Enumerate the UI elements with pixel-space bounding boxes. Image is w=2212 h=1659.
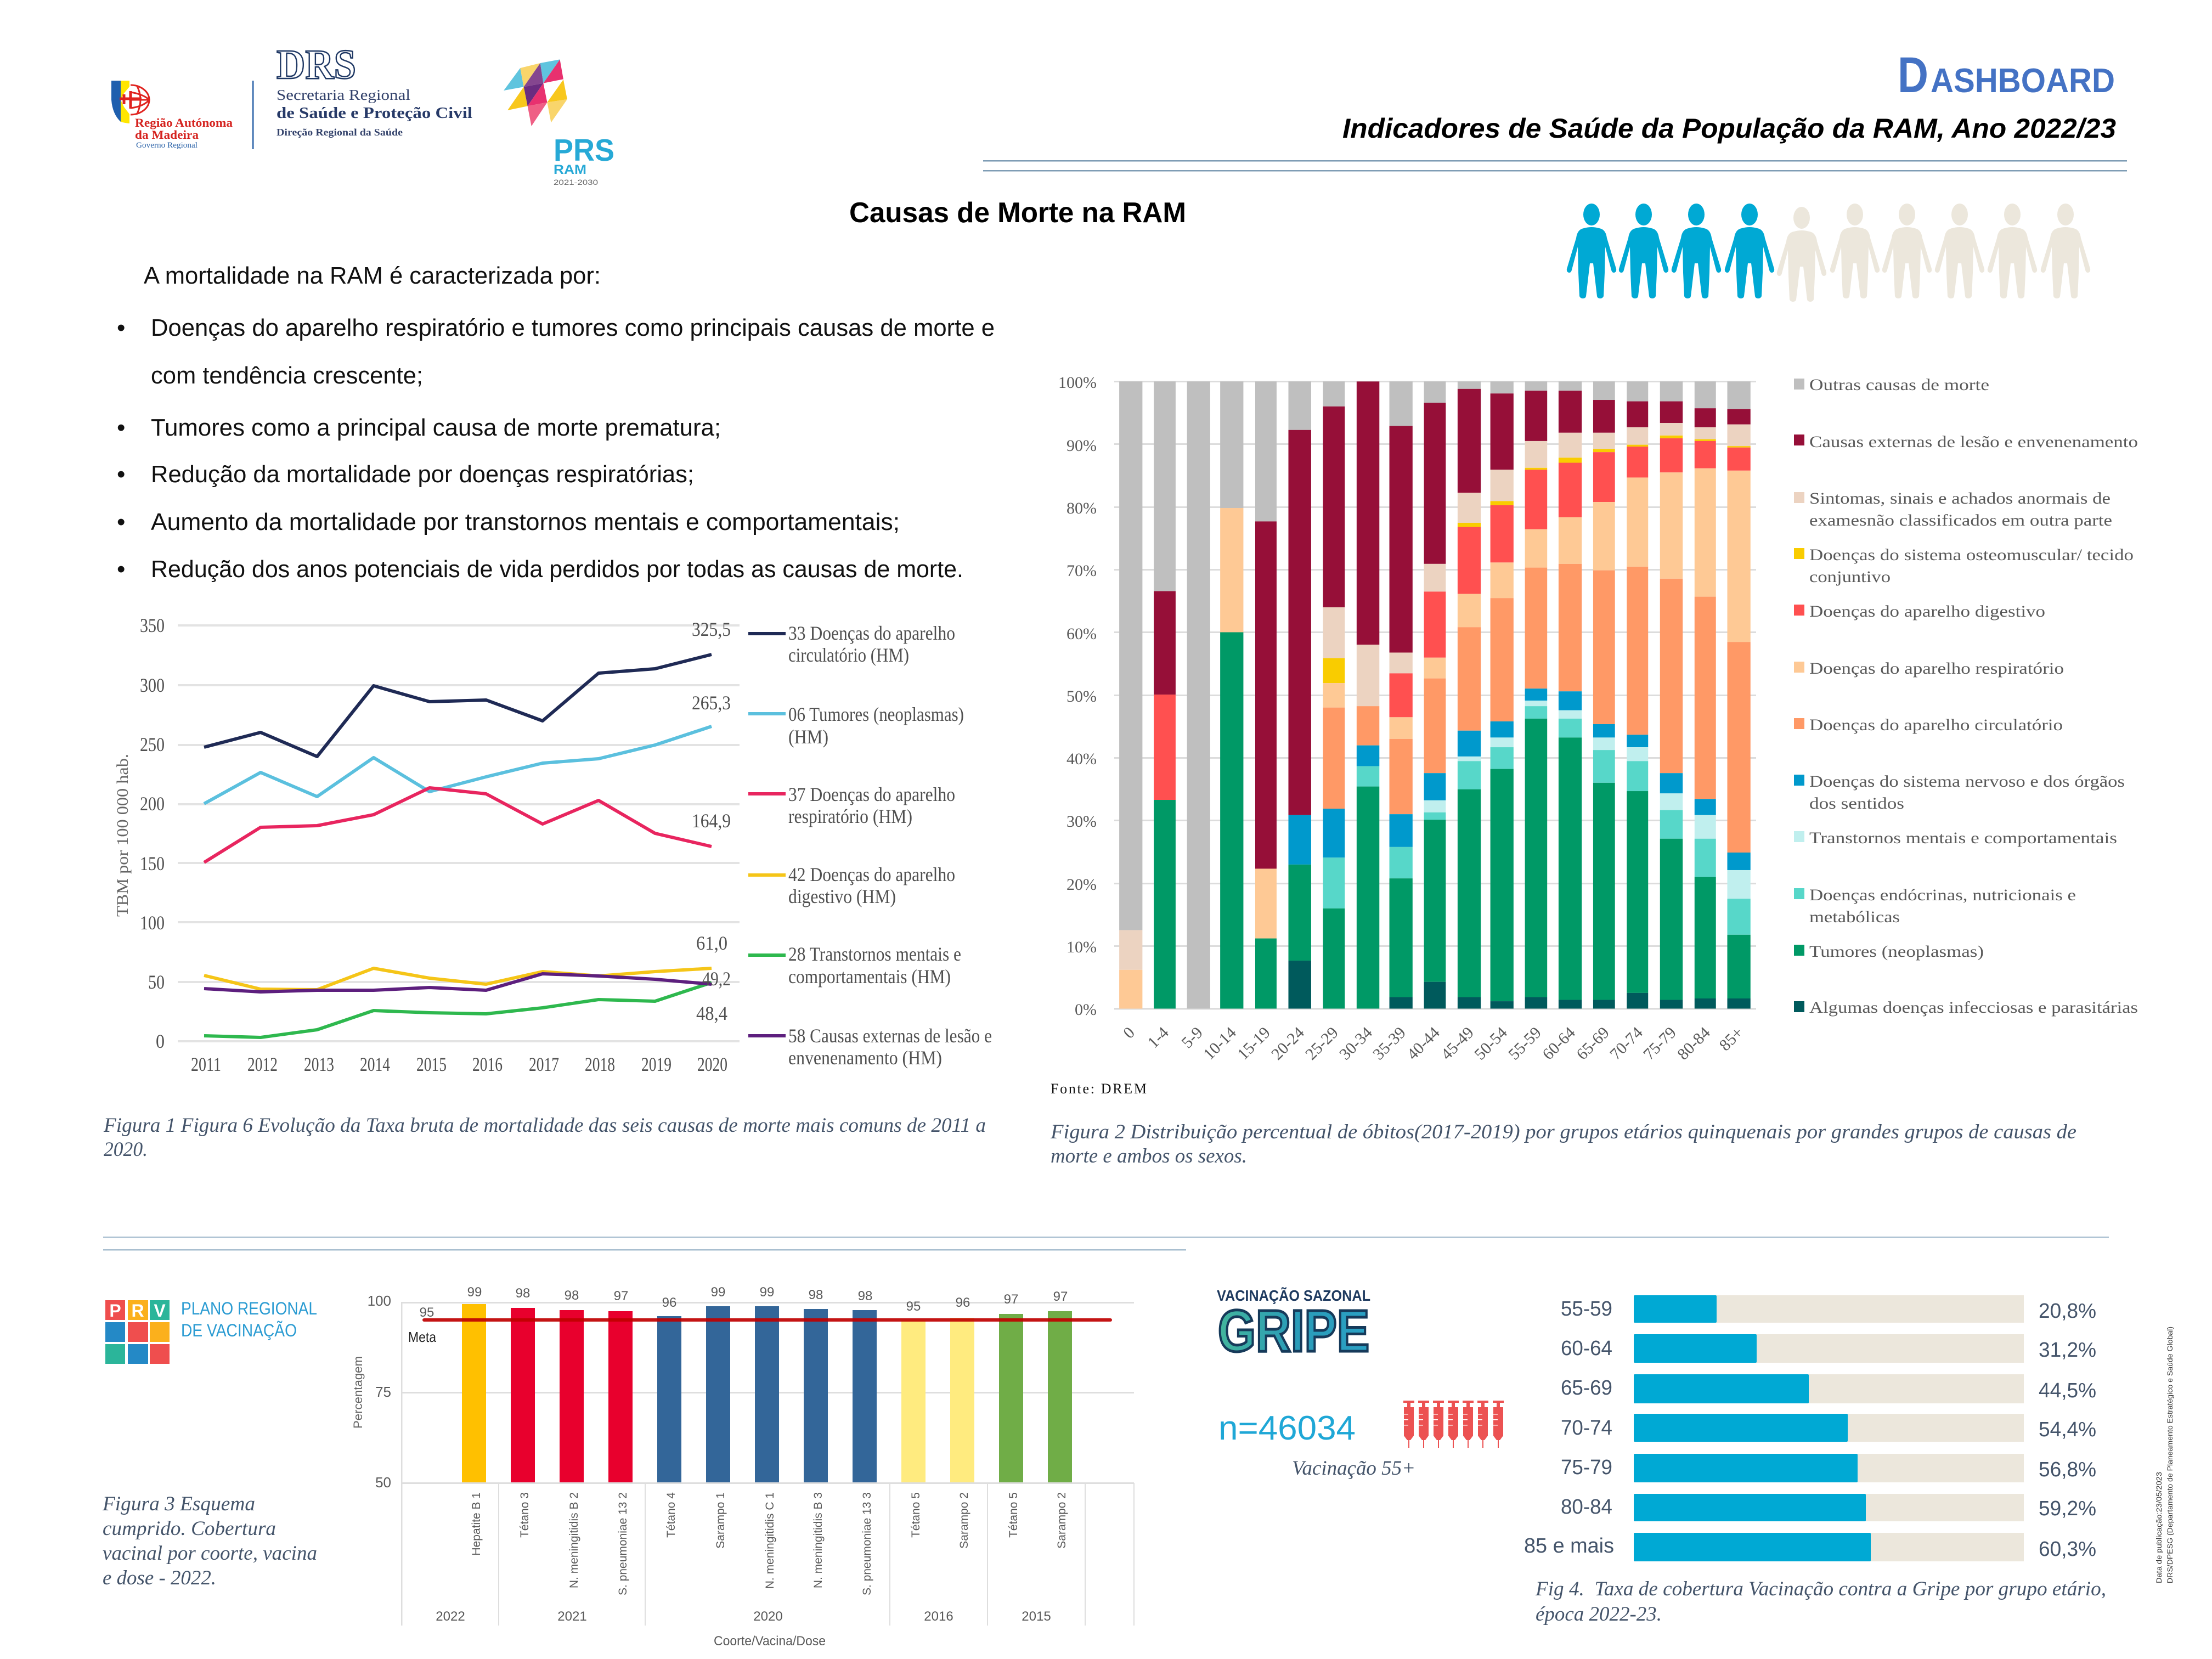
- age labels: 65-69: [1561, 1376, 1612, 1400]
- stacked chart legend: conjuntivo: [1809, 568, 1891, 586]
- line chart legend: (HM): [788, 726, 828, 748]
- text block: key findings: •: [117, 461, 125, 488]
- cohort years: 2020: [753, 1609, 783, 1624]
- y axis labels: 50: [148, 971, 165, 993]
- x axis labels: 2011: [191, 1053, 221, 1075]
- caption: figure 3: cumprido. Cobertura: [103, 1517, 276, 1540]
- stacked chart legend: Outras causas de morte: [1809, 376, 1989, 394]
- logo: DRS Secretaria Regional: DRS: [276, 42, 356, 88]
- line chart legend: circulatório (HM): [788, 644, 909, 666]
- x axis age groups: 85+: [1716, 1024, 1747, 1054]
- category labels: N. meningitidis C 1: [764, 1492, 776, 1589]
- x axis age groups: 1-4: [1144, 1024, 1172, 1052]
- caption: figure 4: Fig 4. Taxa de cobertura Vacinação contra a Gripe por grupo etário,: [1535, 1578, 2106, 1600]
- line chart legend: 58 Causas externas de lesão e: [788, 1025, 992, 1047]
- x axis age groups: 25-29: [1302, 1024, 1342, 1063]
- stacked chart legend: Tumores (neoplasmas): [1809, 943, 1984, 961]
- x axis labels: 2018: [585, 1053, 615, 1075]
- line chart legend: 37 Doenças do aparelho: [788, 783, 955, 805]
- category labels: N. meningitidis B 2: [568, 1492, 580, 1588]
- value labels: 99: [711, 1285, 725, 1300]
- x axis age groups: 15-19: [1234, 1024, 1274, 1063]
- x axis age groups: 45-49: [1437, 1024, 1477, 1063]
- x axis age groups: 65-69: [1573, 1024, 1613, 1063]
- y axis percent labels: 20%: [1066, 876, 1097, 894]
- horizontal bar chart: flu vaccination coverage by age: [1524, 1295, 2096, 1561]
- y axis labels: 350: [140, 614, 165, 636]
- y axis percent labels: 60%: [1066, 625, 1097, 643]
- value labels: 95: [906, 1299, 921, 1314]
- stacked chart legend: [1794, 376, 2138, 1017]
- stacked chart legend: Sintomas, sinais e achados anormais de: [1809, 489, 2111, 507]
- age labels: 60-64: [1561, 1337, 1612, 1360]
- x axis title: Coorte/Vacina/Dose: [714, 1634, 826, 1649]
- line chart legend: [748, 622, 992, 1069]
- y axis percent labels: 40%: [1066, 750, 1097, 768]
- text block: key findings: [117, 262, 995, 583]
- cohort years: 2015: [1022, 1609, 1051, 1624]
- subtitle: Indicadores de Saúde da População da RAM, Ano 2022/23: [1342, 113, 2116, 144]
- text block: key findings: •: [117, 314, 125, 341]
- caption: figure 2: morte e ambos os sexos.: [1051, 1145, 1247, 1167]
- text block: key findings: •: [117, 509, 125, 535]
- category labels: Sarampo 2: [958, 1492, 970, 1549]
- age labels: 75-79: [1561, 1456, 1612, 1479]
- publication note: DRS/DPESG (Departamento de Planeamento Estratégico e Saúde Global): [2165, 1327, 2174, 1583]
- value labels: 97: [1004, 1292, 1018, 1307]
- end value labels: [692, 618, 731, 1024]
- y axis labels: 300: [140, 674, 165, 696]
- target label: Meta: [408, 1329, 436, 1345]
- publication note: Data de publicação:23/05/2023: [2154, 1472, 2163, 1583]
- source note: Fonte: DREM: [1051, 1081, 1147, 1097]
- x axis labels: 2015: [416, 1053, 447, 1075]
- x axis labels: 2013: [304, 1053, 334, 1075]
- line chart: mortality rate 2011-2020: [114, 614, 992, 1075]
- header logos: [111, 42, 614, 187]
- value labels: 96: [662, 1295, 676, 1310]
- caption: figure 2: [1050, 1121, 2076, 1167]
- coverage bars: [462, 1304, 1072, 1482]
- bar chart: vaccination coverage by cohort: [351, 1285, 1135, 1649]
- value labels: 98: [858, 1289, 872, 1304]
- cohort years: 2021: [557, 1609, 587, 1624]
- x axis age groups: 5-9: [1178, 1024, 1206, 1052]
- percentage labels: 44,5%: [2039, 1379, 2096, 1402]
- end value labels: 164,9: [692, 810, 731, 832]
- category labels: [470, 1492, 1068, 1595]
- y axis percent labels: 50%: [1066, 687, 1097, 706]
- stacked bars: [1119, 381, 1751, 1009]
- category labels: Sarampo 2: [1056, 1492, 1068, 1549]
- y axis labels: 75: [375, 1384, 391, 1400]
- percentage labels: 60,3%: [2039, 1538, 2096, 1561]
- x axis age groups: 80-84: [1674, 1024, 1714, 1063]
- data lines: [204, 654, 712, 1037]
- section title: Causas de Morte na RAM: [849, 197, 1186, 229]
- logo: vacinação sazonal gripe: GRIPE: [1218, 1297, 1369, 1364]
- y axis percent labels: 0%: [1075, 1001, 1097, 1019]
- text block: key findings: com tendência crescente;: [151, 362, 423, 389]
- caption: figure 4: época 2022-23.: [1536, 1603, 1662, 1626]
- logo: plano regional de vacinação: [105, 1299, 317, 1364]
- x axis labels: 2014: [360, 1053, 390, 1075]
- logo: DRS Secretaria Regional: Secretaria Regional: [276, 87, 410, 103]
- stacked chart legend: Transtornos mentais e comportamentais: [1809, 829, 2117, 847]
- value labels: 97: [614, 1289, 628, 1304]
- value labels: 99: [760, 1285, 774, 1300]
- y axis percent labels: 100%: [1058, 374, 1097, 392]
- x axis age groups: 35-39: [1369, 1024, 1409, 1063]
- end value labels: 49,2: [702, 968, 731, 990]
- text block: key findings: Redução dos anos potenciais de vida perdidos por todas as causas de morte.: [151, 556, 963, 583]
- stacked chart legend: Doenças do aparelho digestivo: [1809, 602, 2045, 620]
- x axis labels: [191, 1053, 727, 1075]
- caption: figure 1: [103, 1114, 986, 1161]
- percentage labels: 56,8%: [2039, 1458, 2096, 1481]
- caption: figure 3: Figura 3 Esquema: [102, 1493, 255, 1515]
- age labels: 70-74: [1561, 1417, 1612, 1440]
- y axis percent labels: [1058, 374, 1097, 1019]
- caption: figure 3: e dose - 2022.: [103, 1567, 216, 1589]
- y axis percent labels: 30%: [1066, 812, 1097, 831]
- stacked chart legend: metabólicas: [1809, 908, 1900, 926]
- category labels: N. meningitidis B 3: [812, 1492, 825, 1588]
- x axis age groups: 30-34: [1336, 1024, 1376, 1063]
- x axis labels: 2020: [697, 1053, 727, 1075]
- age labels: 55-59: [1561, 1297, 1612, 1321]
- icon: people pictogram 4 in 10: [1567, 204, 2090, 302]
- text block: key findings: Redução da mortalidade por doenças respiratórias;: [151, 461, 694, 488]
- x axis age groups: 70-74: [1606, 1024, 1646, 1063]
- caption: figure 4: [1535, 1578, 2106, 1626]
- line chart legend: comportamentais (HM): [788, 966, 951, 988]
- dashboard heading: ASHBOARD: [1931, 62, 2115, 100]
- line chart legend: 42 Doenças do aparelho: [788, 864, 955, 885]
- x axis age groups: 0: [1120, 1024, 1138, 1042]
- stacked chart legend: Doenças endócrinas, nutricionais e: [1809, 886, 2076, 904]
- logo: PRS RAM colourful mark: PRS: [554, 133, 614, 168]
- category labels: Sarampo 1: [714, 1492, 727, 1549]
- x axis age groups: 20-24: [1268, 1024, 1308, 1063]
- x axis age groups: 60-64: [1539, 1024, 1579, 1063]
- x axis age groups: 75-79: [1640, 1024, 1680, 1063]
- logo: DRS Secretaria Regional: Direção Regional da Saúde: [276, 127, 403, 138]
- logo: plano regional de vacinação: V: [154, 1301, 166, 1321]
- coverage fills: [1634, 1295, 1871, 1561]
- cohort years: 2016: [924, 1609, 953, 1624]
- y axis labels: 0: [156, 1030, 165, 1052]
- value labels: 96: [956, 1295, 970, 1310]
- value labels: 98: [809, 1288, 823, 1302]
- stacked chart legend: dos sentidos: [1809, 794, 1904, 812]
- y axis percent labels: 10%: [1066, 938, 1097, 956]
- x axis age groups: 55-59: [1505, 1024, 1545, 1063]
- percentage labels: 20,8%: [2039, 1300, 2096, 1323]
- line chart legend: 33 Doenças do aparelho: [788, 622, 955, 644]
- logo: PRS RAM colourful mark: 2021-2030: [554, 178, 598, 187]
- end value labels: 48,4: [696, 1002, 727, 1024]
- logo: DRS Secretaria Regional: de Saúde e Proteção Civil: [276, 104, 472, 122]
- logo: plano regional de vacinação: PLANO REGIONAL: [181, 1299, 317, 1318]
- value labels: 98: [516, 1286, 530, 1301]
- value labels: 95: [420, 1305, 434, 1320]
- age labels: 80-84: [1561, 1496, 1612, 1519]
- caption: figure 2: Figura 2 Distribuição percentual de óbitos(2017-2019) por grupos etários quinquenais por grandes grupos de causas de: [1050, 1121, 2076, 1143]
- icon: syringes: [1403, 1401, 1504, 1448]
- line chart legend: 28 Transtornos mentais e: [788, 943, 961, 965]
- line chart legend: digestivo (HM): [788, 885, 896, 907]
- value labels: 99: [467, 1285, 482, 1300]
- end value labels: 325,5: [692, 618, 731, 640]
- y axis labels: 100: [140, 912, 165, 934]
- stacked bar chart: deaths by age group and cause: [1058, 374, 1756, 1063]
- x axis age groups: 50-54: [1471, 1024, 1511, 1063]
- logo: plano regional de vacinação: DE VACINAÇÃO: [181, 1321, 297, 1340]
- end value labels: 61,0: [696, 932, 727, 954]
- caption: figure 3: [102, 1493, 317, 1589]
- x axis age groups: 10-14: [1200, 1024, 1240, 1063]
- y axis labels: 200: [140, 793, 165, 815]
- y axis title: TBM por 100 000 hab.: [114, 754, 132, 917]
- text block: key findings: •: [117, 414, 125, 441]
- x axis labels: 2017: [529, 1053, 559, 1075]
- text block: key findings: Tumores como a principal causa de morte prematura;: [151, 414, 721, 441]
- line chart legend: envenenamento (HM): [788, 1047, 942, 1069]
- logo: PRS RAM colourful mark: RAM: [554, 162, 586, 177]
- logo: Região Autónoma da Madeira: da Madeira: [135, 128, 199, 142]
- text block: key findings: Aumento da mortalidade por transtornos mentais e comportamentais;: [151, 509, 900, 535]
- caption: figure 1: 2020.: [104, 1138, 148, 1161]
- caption: figure 3: vacinal por coorte, vacina: [103, 1542, 317, 1565]
- y axis percent labels: 80%: [1066, 499, 1097, 517]
- dashboard heading: D: [1898, 47, 1928, 103]
- category labels: Tétano 3: [518, 1492, 531, 1538]
- value labels: 98: [565, 1288, 579, 1303]
- logo: plano regional de vacinação: R: [131, 1301, 144, 1321]
- stacked chart legend: examesnão classificados em outra parte: [1809, 511, 2112, 529]
- x axis age groups: [1120, 1024, 1747, 1063]
- category labels: Tétano 4: [665, 1492, 678, 1538]
- percentage labels: 31,2%: [2039, 1339, 2096, 1362]
- y axis title: Percentagem: [351, 1356, 365, 1429]
- x axis labels: 2019: [641, 1053, 672, 1075]
- stacked chart legend: Algumas doenças infecciosas e parasitárias: [1809, 998, 2138, 1017]
- stacked chart legend: Doenças do aparelho respiratório: [1809, 659, 2064, 678]
- category labels: S. pneumoniae 13 3: [861, 1492, 873, 1595]
- stacked chart legend: Doenças do sistema nervoso e dos órgãos: [1809, 772, 2125, 791]
- category labels: Tétano 5: [1007, 1492, 1020, 1538]
- category labels: Tétano 5: [910, 1492, 922, 1538]
- text block: key findings: •: [117, 556, 125, 583]
- stacked chart legend: Doenças do sistema osteomuscular/ tecido: [1809, 546, 2134, 564]
- stacked chart legend: Doenças do aparelho circulatório: [1809, 716, 2063, 734]
- caption: figure 1: Figura 1 Figura 6 Evolução da Taxa bruta de mortalidade das seis causas de morte mais comuns de 2011 a: [103, 1114, 986, 1137]
- category labels: S. pneumoniae 13 2: [617, 1492, 629, 1595]
- logo: Região Autónoma da Madeira: Governo Regional: [136, 141, 198, 150]
- logo: PRS RAM colourful mark: [504, 59, 614, 187]
- logo: Região Autónoma da Madeira: Região Autónoma: [135, 116, 233, 129]
- line chart legend: 06 Tumores (neoplasmas): [788, 703, 964, 725]
- y axis labels: 150: [140, 853, 165, 874]
- end value labels: 265,3: [692, 692, 731, 714]
- y axis labels: [368, 1293, 391, 1491]
- x axis labels: 2012: [247, 1053, 278, 1075]
- value labels: [420, 1285, 1068, 1320]
- percentage labels: [2039, 1300, 2096, 1561]
- age labels: [1524, 1297, 1614, 1558]
- value labels: 97: [1053, 1289, 1068, 1304]
- publication note: [2154, 1327, 2174, 1583]
- line chart legend: respiratório (HM): [788, 805, 912, 827]
- y axis labels: [140, 614, 165, 1052]
- vaccination age note: Vacinação 55+: [1292, 1457, 1415, 1480]
- y axis labels: 50: [375, 1474, 391, 1491]
- age labels: 85 e mais: [1524, 1534, 1614, 1558]
- logo: Região Autónoma da Madeira: [111, 81, 233, 150]
- vaccinated count: n=46034: [1218, 1409, 1356, 1447]
- category labels: Hepatite B 1: [470, 1492, 483, 1556]
- logo: DRS Secretaria Regional: [276, 42, 472, 138]
- x axis labels: 2016: [472, 1053, 503, 1075]
- percentage labels: 54,4%: [2039, 1418, 2096, 1441]
- text block: key findings: Doenças do aparelho respiratório e tumores como principais causas de morte e: [151, 314, 995, 341]
- logo: plano regional de vacinação: P: [109, 1301, 121, 1321]
- y axis labels: 250: [140, 733, 165, 755]
- y axis labels: 100: [368, 1293, 391, 1309]
- x axis age groups: 40-44: [1403, 1024, 1443, 1063]
- percentage labels: 59,2%: [2039, 1497, 2096, 1520]
- y axis percent labels: 90%: [1066, 437, 1097, 455]
- cohort years: [436, 1609, 1051, 1624]
- target line 95: [424, 1318, 1110, 1322]
- stacked chart legend: Causas externas de lesão e envenenamento: [1809, 433, 2138, 451]
- logo: vacinação sazonal gripe: VACINAÇÃO SAZONAL: [1217, 1287, 1370, 1304]
- y axis percent labels: 70%: [1066, 562, 1097, 580]
- cohort years: 2022: [436, 1609, 465, 1624]
- text block: key findings: A mortalidade na RAM é caracterizada por:: [144, 262, 601, 289]
